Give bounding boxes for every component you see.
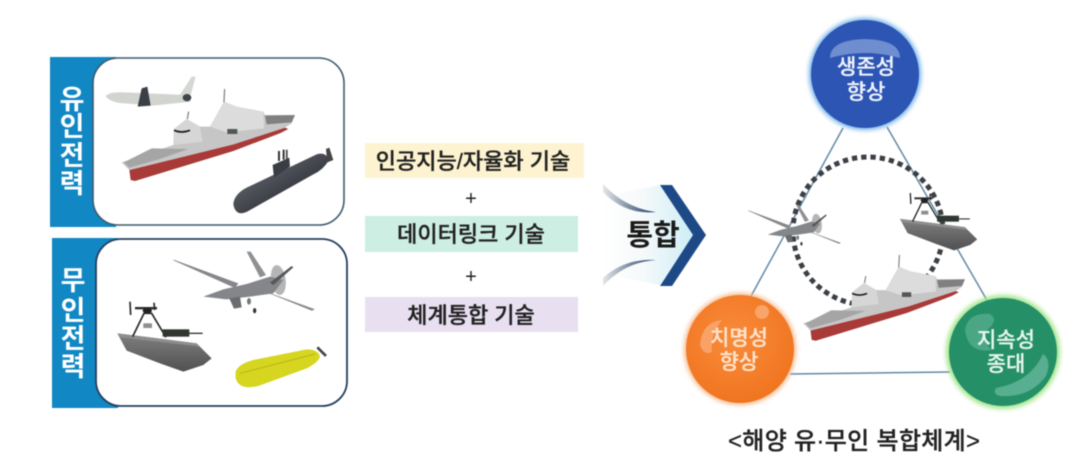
- icon: destroyer: [803, 255, 965, 341]
- panel label: manned forces: 유: [60, 85, 84, 115]
- panel label: manned forces: [50, 57, 116, 227]
- technology box: systems integration: [365, 297, 578, 332]
- panel label: unmanned forces: 무: [61, 266, 85, 296]
- technology box: AI and autonomy: [365, 143, 584, 178]
- icon: yellow underwater vehicle: [236, 347, 326, 387]
- circle: sustainability: 지속성: [977, 329, 1035, 352]
- dotted network ring: [793, 157, 943, 305]
- circle: survivability: [809, 18, 921, 130]
- circle: sustainability: [946, 295, 1060, 409]
- panel label: manned forces: 전: [60, 141, 84, 171]
- icon: unmanned surface vessel: [900, 193, 977, 250]
- plus sign: +: [465, 188, 477, 210]
- circle: survivability: 생존성: [837, 56, 895, 79]
- circle: lethality: 치명성: [710, 327, 768, 350]
- diagram: maritime manned-unmanned teaming: [684, 18, 1060, 409]
- icon: drone: [173, 252, 314, 313]
- arrow: integration: 통합: [626, 219, 680, 252]
- circle: sustainability: 종대: [987, 353, 1025, 376]
- icon: unmanned surface vessel: [117, 302, 212, 372]
- panel frame: unmanned forces: [96, 239, 347, 406]
- arrow: integration: [603, 184, 706, 286]
- icon: submarine: [233, 148, 333, 213]
- panel: manned forces: [50, 57, 344, 227]
- panel label: manned forces: 력: [60, 169, 84, 199]
- icon: patrol aircraft: [106, 77, 196, 107]
- icon: destroyer: [122, 89, 295, 181]
- technology list: [365, 143, 584, 332]
- panel label: manned forces: 인: [60, 112, 84, 142]
- icon: drone: [748, 205, 840, 246]
- panel label: unmanned forces: 력: [61, 352, 85, 382]
- panel label: unmanned forces: [52, 238, 118, 408]
- panel label: unmanned forces: 인: [61, 296, 85, 326]
- technology box: data link: [365, 216, 578, 252]
- panel: unmanned forces: [52, 238, 347, 408]
- triangle connectors: [750, 127, 988, 374]
- circle: lethality: 향상: [720, 351, 758, 374]
- caption: <해양 유·무인 복합체계>: [728, 428, 980, 455]
- plus sign: +: [465, 266, 477, 288]
- panel label: unmanned forces: 전: [61, 324, 85, 354]
- circle: survivability: 향상: [847, 81, 885, 104]
- circle: lethality: [684, 293, 796, 405]
- technology box: systems integration: 체계통합 기술: [407, 303, 535, 328]
- technology box: AI and autonomy: 인공지능/자율화 기술: [376, 149, 570, 174]
- panel frame: manned forces: [93, 58, 344, 225]
- technology box: data link: 데이터링크 기술: [397, 222, 545, 247]
